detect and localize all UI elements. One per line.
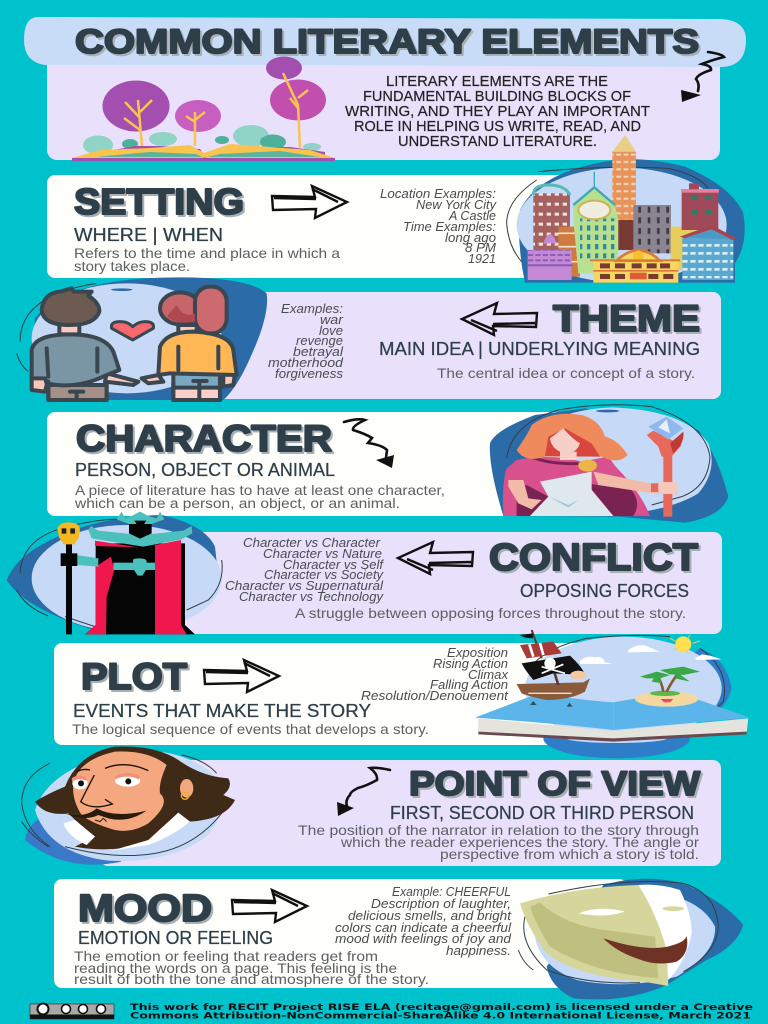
panel: plot bbox=[54, 630, 750, 758]
subheading: MAIN IDEA | UNDERLYING MEANING bbox=[379, 339, 700, 359]
examples: New York City bbox=[416, 197, 497, 212]
examples bbox=[335, 884, 512, 958]
icon: squiggle arrow bbox=[344, 419, 394, 468]
heading: point of view: POINT OF VIEW bbox=[409, 765, 701, 803]
illustration: villain with skull staff bbox=[7, 512, 222, 634]
illustration: book with trees bbox=[72, 56, 335, 161]
examples: Climax bbox=[468, 667, 508, 682]
illustration: shakespeare portrait bbox=[22, 746, 235, 865]
description: Refers to the time and place in which a bbox=[74, 245, 340, 261]
description: result of both the tone and atmosphere of the story. bbox=[74, 971, 429, 987]
subheading: OPPOSING FORCES bbox=[520, 581, 689, 601]
heading: plot: PLOT bbox=[81, 656, 187, 697]
examples: Character vs Supernatural bbox=[225, 578, 384, 593]
examples: mood with feelings of joy and bbox=[335, 931, 512, 946]
heading: character: CHARACTER bbox=[78, 420, 334, 461]
examples: long ago bbox=[445, 230, 496, 245]
heading: theme: THEME bbox=[555, 300, 702, 341]
heading: character: CHARACTER bbox=[76, 418, 332, 459]
examples: motherhood bbox=[268, 355, 344, 370]
arrow: right bbox=[232, 890, 307, 922]
icon: creative commons badge bbox=[30, 1004, 114, 1019]
examples: Character vs Society bbox=[264, 567, 384, 582]
examples: Rising Action bbox=[433, 656, 508, 671]
footer: license bbox=[30, 1003, 753, 1022]
illustration: couple holding hands bbox=[17, 277, 267, 400]
examples: 8 PM bbox=[465, 240, 496, 255]
heading: setting: SETTING bbox=[76, 183, 246, 224]
heading: point of view: POINT OF VIEW bbox=[411, 767, 703, 805]
examples: Location Examples: bbox=[380, 186, 496, 201]
examples: Character vs Technology bbox=[239, 589, 384, 604]
subheading: EVENTS THAT MAKE THE STORY bbox=[73, 701, 371, 721]
examples: Time Examples: bbox=[403, 219, 496, 234]
panel: character bbox=[47, 405, 728, 523]
description: A piece of literature has to have at least one character, bbox=[75, 482, 445, 498]
panel: point of view bbox=[22, 746, 721, 866]
examples: A Castle bbox=[448, 208, 496, 223]
examples bbox=[380, 186, 497, 266]
examples: delicious smells, and bright bbox=[348, 908, 512, 923]
heading: mood: MOOD bbox=[78, 888, 212, 930]
icon: squiggle arrow bbox=[337, 768, 390, 816]
panel: conflict bbox=[7, 512, 722, 634]
description: perspective from which a story is told. bbox=[440, 846, 699, 862]
heading: setting: SETTING bbox=[74, 181, 244, 222]
examples: love bbox=[319, 323, 343, 338]
heading: conflict: CONFLICT bbox=[489, 537, 698, 579]
intro text bbox=[345, 73, 650, 150]
examples: Character vs Nature bbox=[263, 546, 382, 561]
illustration: comedy mask bbox=[518, 879, 743, 999]
examples bbox=[268, 301, 344, 381]
arrow: left bbox=[398, 542, 473, 574]
subheading: PERSON, OBJECT OR ANIMAL bbox=[75, 460, 335, 480]
examples: 1921 bbox=[468, 251, 496, 266]
examples: forgiveness bbox=[275, 366, 344, 381]
license text: This work for RECIT Project RISE ELA (recitage@gmail.com) is licensed under a Creative bbox=[130, 1003, 753, 1013]
illustration: pirate ship and island on open book bbox=[475, 630, 750, 758]
subheading: EMOTION OR FEELING bbox=[78, 928, 273, 948]
panel: introduction bbox=[24, 17, 746, 161]
description bbox=[74, 245, 340, 274]
examples: Exposition bbox=[447, 645, 508, 660]
description: which can be a person, an object, or an animal. bbox=[74, 495, 400, 511]
examples: Character vs Self bbox=[283, 557, 384, 572]
license text: Commons Attribution-NonCommercial-ShareAlike 4.0 International License, March 2021 bbox=[130, 1012, 751, 1022]
panel: setting bbox=[47, 135, 745, 283]
intro text: LITERARY ELEMENTS ARE THE bbox=[386, 73, 608, 90]
description: The logical sequence of events that develops a story. bbox=[72, 721, 429, 737]
examples: Example: CHEERFUL bbox=[392, 884, 511, 899]
intro text: UNDERSTAND LITERATURE. bbox=[398, 133, 597, 150]
examples: Examples: bbox=[281, 301, 343, 316]
description bbox=[74, 948, 429, 987]
arrow: right bbox=[204, 660, 279, 692]
intro text: WRITING, AND THEY PLAY AN IMPORTANT bbox=[345, 103, 650, 120]
examples: Resolution/Denouement bbox=[361, 688, 509, 703]
illustration: city bbox=[507, 135, 745, 283]
arrow: right bbox=[272, 186, 347, 218]
description: story takes place. bbox=[74, 258, 190, 274]
heading: plot: PLOT bbox=[83, 658, 189, 699]
description: The position of the narrator in relation to the story through bbox=[298, 822, 699, 838]
license text bbox=[130, 1003, 753, 1022]
description bbox=[298, 822, 699, 862]
description: A struggle between opposing forces throughout the story. bbox=[295, 605, 686, 621]
title: COMMON LITERARY ELEMENTS bbox=[77, 25, 701, 63]
heading: mood: MOOD bbox=[80, 890, 214, 932]
description: reading the words on a page. This feeling is the bbox=[74, 960, 397, 976]
examples: Description of laughter, bbox=[371, 896, 511, 911]
description: The emotion or feeling that readers get from bbox=[74, 948, 378, 964]
subheading: FIRST, SECOND OR THIRD PERSON bbox=[390, 803, 694, 823]
panel: theme bbox=[17, 277, 721, 400]
examples: Character vs Character bbox=[243, 535, 381, 550]
arrow: left bbox=[462, 303, 537, 335]
examples bbox=[361, 645, 509, 703]
title banner bbox=[24, 17, 746, 67]
examples: happiness. bbox=[446, 943, 511, 958]
intro text: ROLE IN HELPING US WRITE, READ, AND bbox=[354, 118, 641, 135]
examples: betrayal bbox=[293, 344, 344, 359]
examples bbox=[225, 535, 384, 604]
description: which the reader experiences the story. The angle or bbox=[340, 834, 699, 850]
description bbox=[74, 482, 445, 511]
subheading: WHERE | WHEN bbox=[74, 225, 223, 245]
heading: theme: THEME bbox=[553, 298, 700, 339]
examples: colors can indicate a cheerful bbox=[335, 920, 512, 935]
icon: squiggle arrow bbox=[681, 52, 724, 102]
heading: conflict: CONFLICT bbox=[491, 539, 700, 581]
description: The central idea or concept of a story. bbox=[437, 365, 695, 381]
intro text: FUNDAMENTAL BUILDING BLOCKS OF bbox=[363, 88, 631, 105]
examples: revenge bbox=[296, 333, 343, 348]
examples: Falling Action bbox=[430, 677, 508, 692]
examples: war bbox=[320, 312, 344, 327]
panel: mood bbox=[54, 879, 743, 999]
illustration: heroine with staff bbox=[490, 405, 728, 523]
title: COMMON LITERARY ELEMENTS bbox=[75, 23, 699, 61]
